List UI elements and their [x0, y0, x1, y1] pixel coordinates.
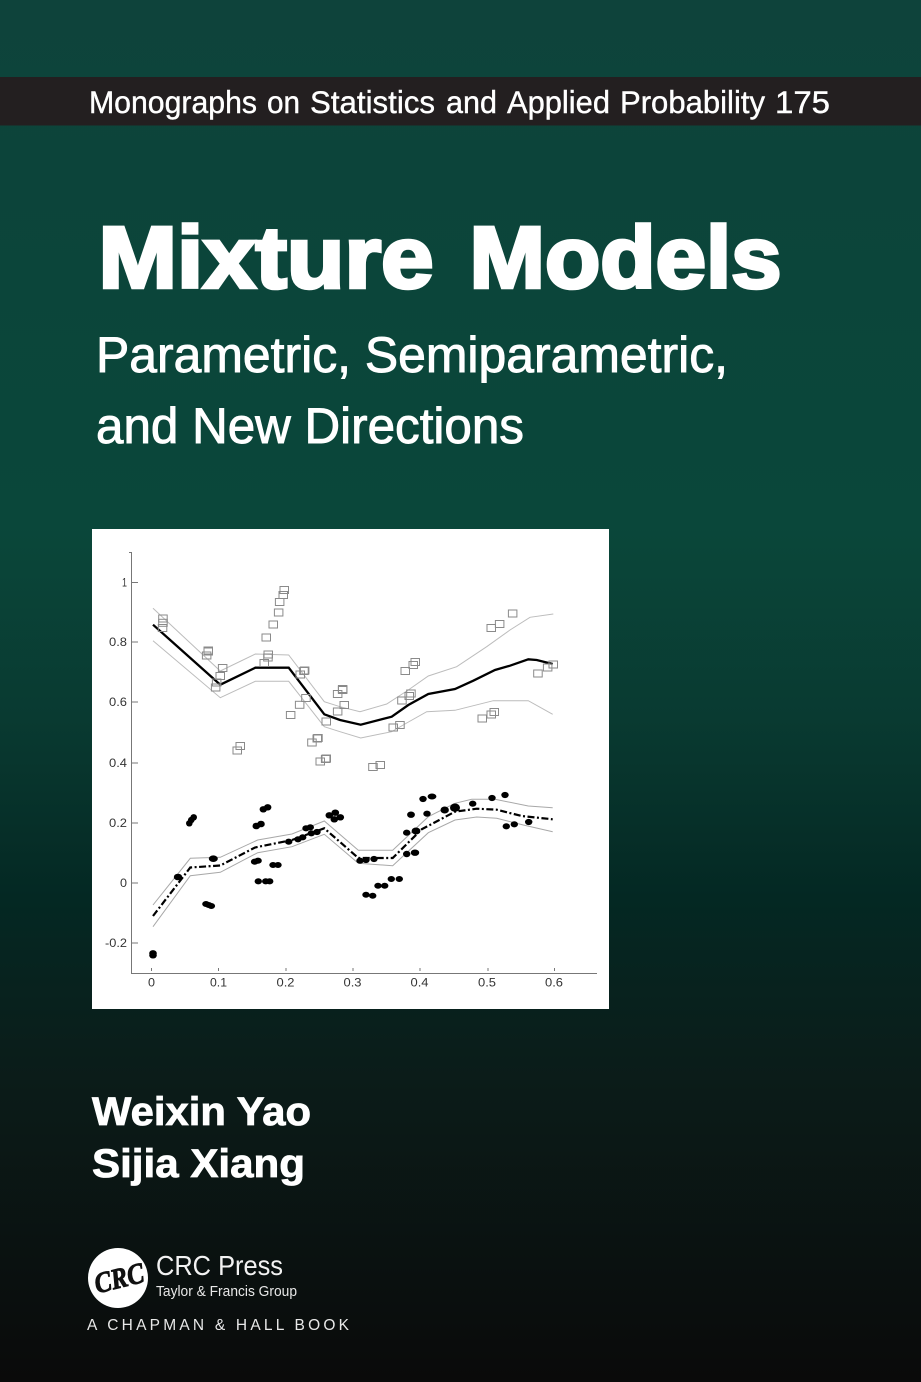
- series title: Statistics: [310, 84, 435, 120]
- publisher name: CRC Press: [156, 1250, 283, 1281]
- title: Models: [470, 210, 782, 306]
- publisher logo: [87, 1248, 350, 1334]
- series title: 175: [775, 84, 830, 120]
- chart panel: [92, 529, 609, 1009]
- series band: [0, 77, 921, 126]
- y axis labels: 0.2: [109, 818, 127, 830]
- series title: on: [267, 84, 300, 120]
- x axis labels: 0.3: [344, 978, 362, 990]
- series title: Probability: [620, 84, 765, 120]
- title: [98, 210, 782, 306]
- subtitle: Parametric, Semiparametric,: [96, 327, 728, 383]
- subtitle: and New Directions: [96, 398, 524, 454]
- title: Mixture: [98, 210, 434, 306]
- upper component confidence bands: [153, 608, 553, 738]
- icon: CRC circle: [88, 1248, 148, 1308]
- series title: Monographs: [89, 84, 257, 120]
- icon: CRC circle: CRC: [91, 1257, 148, 1300]
- lower component dot markers: [149, 792, 532, 958]
- x axis labels: 0.4: [410, 978, 429, 990]
- y axis labels: [105, 578, 128, 950]
- authors: [92, 1090, 311, 1186]
- series title: Applied: [507, 84, 610, 120]
- imprint line: A CHAPMAN & HALL BOOK: [87, 1317, 350, 1334]
- y axis labels: 0: [120, 878, 127, 890]
- y axis labels: 0.6: [109, 697, 127, 709]
- y axis labels: -0.2: [105, 938, 127, 950]
- x axis labels: 0.6: [545, 978, 563, 990]
- publisher group: Taylor & Francis Group: [156, 1283, 297, 1300]
- authors: Weixin Yao: [92, 1090, 311, 1134]
- x axis labels: 0.1: [210, 978, 227, 990]
- upper component square markers: [158, 586, 558, 770]
- chart axes: [129, 552, 597, 974]
- series title: [89, 84, 830, 120]
- series title: and: [446, 84, 497, 120]
- subtitle: [96, 327, 728, 454]
- lower component fitted dash-dot line: [153, 809, 553, 916]
- upper component fitted line: [153, 625, 553, 725]
- x axis labels: 0.2: [276, 978, 294, 990]
- x axis labels: [148, 978, 563, 990]
- y axis labels: 0.4: [109, 758, 128, 770]
- lower component confidence bands: [153, 799, 553, 927]
- y axis labels: 0.8: [109, 637, 127, 649]
- y axis labels: 1: [122, 578, 127, 590]
- x axis labels: 0.5: [478, 978, 496, 990]
- authors: Sijia Xiang: [92, 1142, 305, 1186]
- x axis labels: 0: [148, 978, 155, 990]
